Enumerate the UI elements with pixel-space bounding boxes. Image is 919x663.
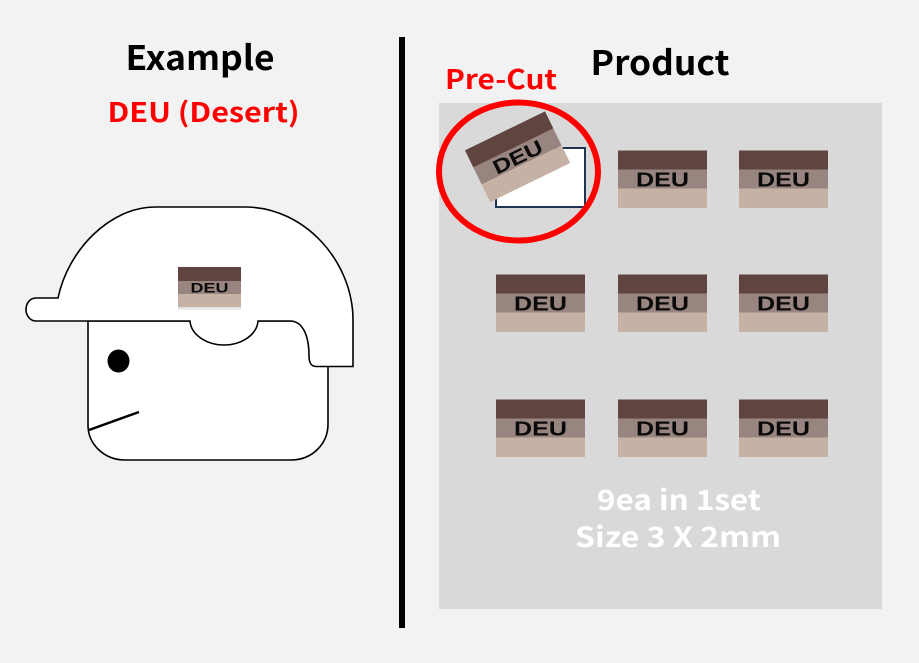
- heading: Example: Example: [126, 31, 274, 80]
- subheading: DEU (Desert): DEU (Desert): [108, 91, 300, 130]
- patch row 3 col 1: DEU: [514, 418, 567, 440]
- patch row 3 col 2: DEU: [636, 418, 689, 440]
- patch row 1 col 2: DEU: [636, 170, 689, 192]
- helmet: [26, 207, 353, 366]
- patch row 3 col 2: [618, 400, 707, 457]
- patch: peeled DEU: DEU: [490, 136, 547, 179]
- patch: peeled DEU: [465, 111, 570, 202]
- text: set quantity: 9ea in 1set: [597, 479, 761, 519]
- pre-cut slot: [496, 148, 585, 207]
- patch row 1 col 2: [618, 150, 707, 208]
- patch row 3 col 1: [496, 400, 585, 457]
- eye: [108, 350, 130, 372]
- callout ring: [439, 102, 598, 240]
- patch row 1 col 3: [739, 150, 828, 208]
- helmet patch: DEU: [190, 280, 228, 296]
- patch row 2 col 1: [496, 274, 585, 332]
- patch row 3 col 3: DEU: [757, 418, 810, 440]
- text: size: Size 3 X 2mm: [575, 516, 781, 556]
- patch row 1 col 3: DEU: [757, 170, 810, 192]
- illustration: soldier head with helmet: [26, 207, 353, 460]
- patch row 2 col 3: DEU: [757, 294, 810, 316]
- helmet patch: [178, 267, 241, 310]
- patch row 2 col 3: [739, 274, 828, 332]
- panel: product sheet: [439, 103, 882, 609]
- mouth: [89, 412, 139, 430]
- patch row 3 col 3: [739, 400, 828, 457]
- patch row 2 col 1: DEU: [514, 294, 567, 316]
- label: Pre-Cut: Pre-Cut: [445, 58, 557, 97]
- head: [88, 321, 328, 460]
- divider: [399, 37, 405, 628]
- heading: Product: Product: [590, 36, 730, 85]
- patch row 2 col 2: [618, 274, 707, 332]
- patch row 2 col 2: DEU: [636, 294, 689, 316]
